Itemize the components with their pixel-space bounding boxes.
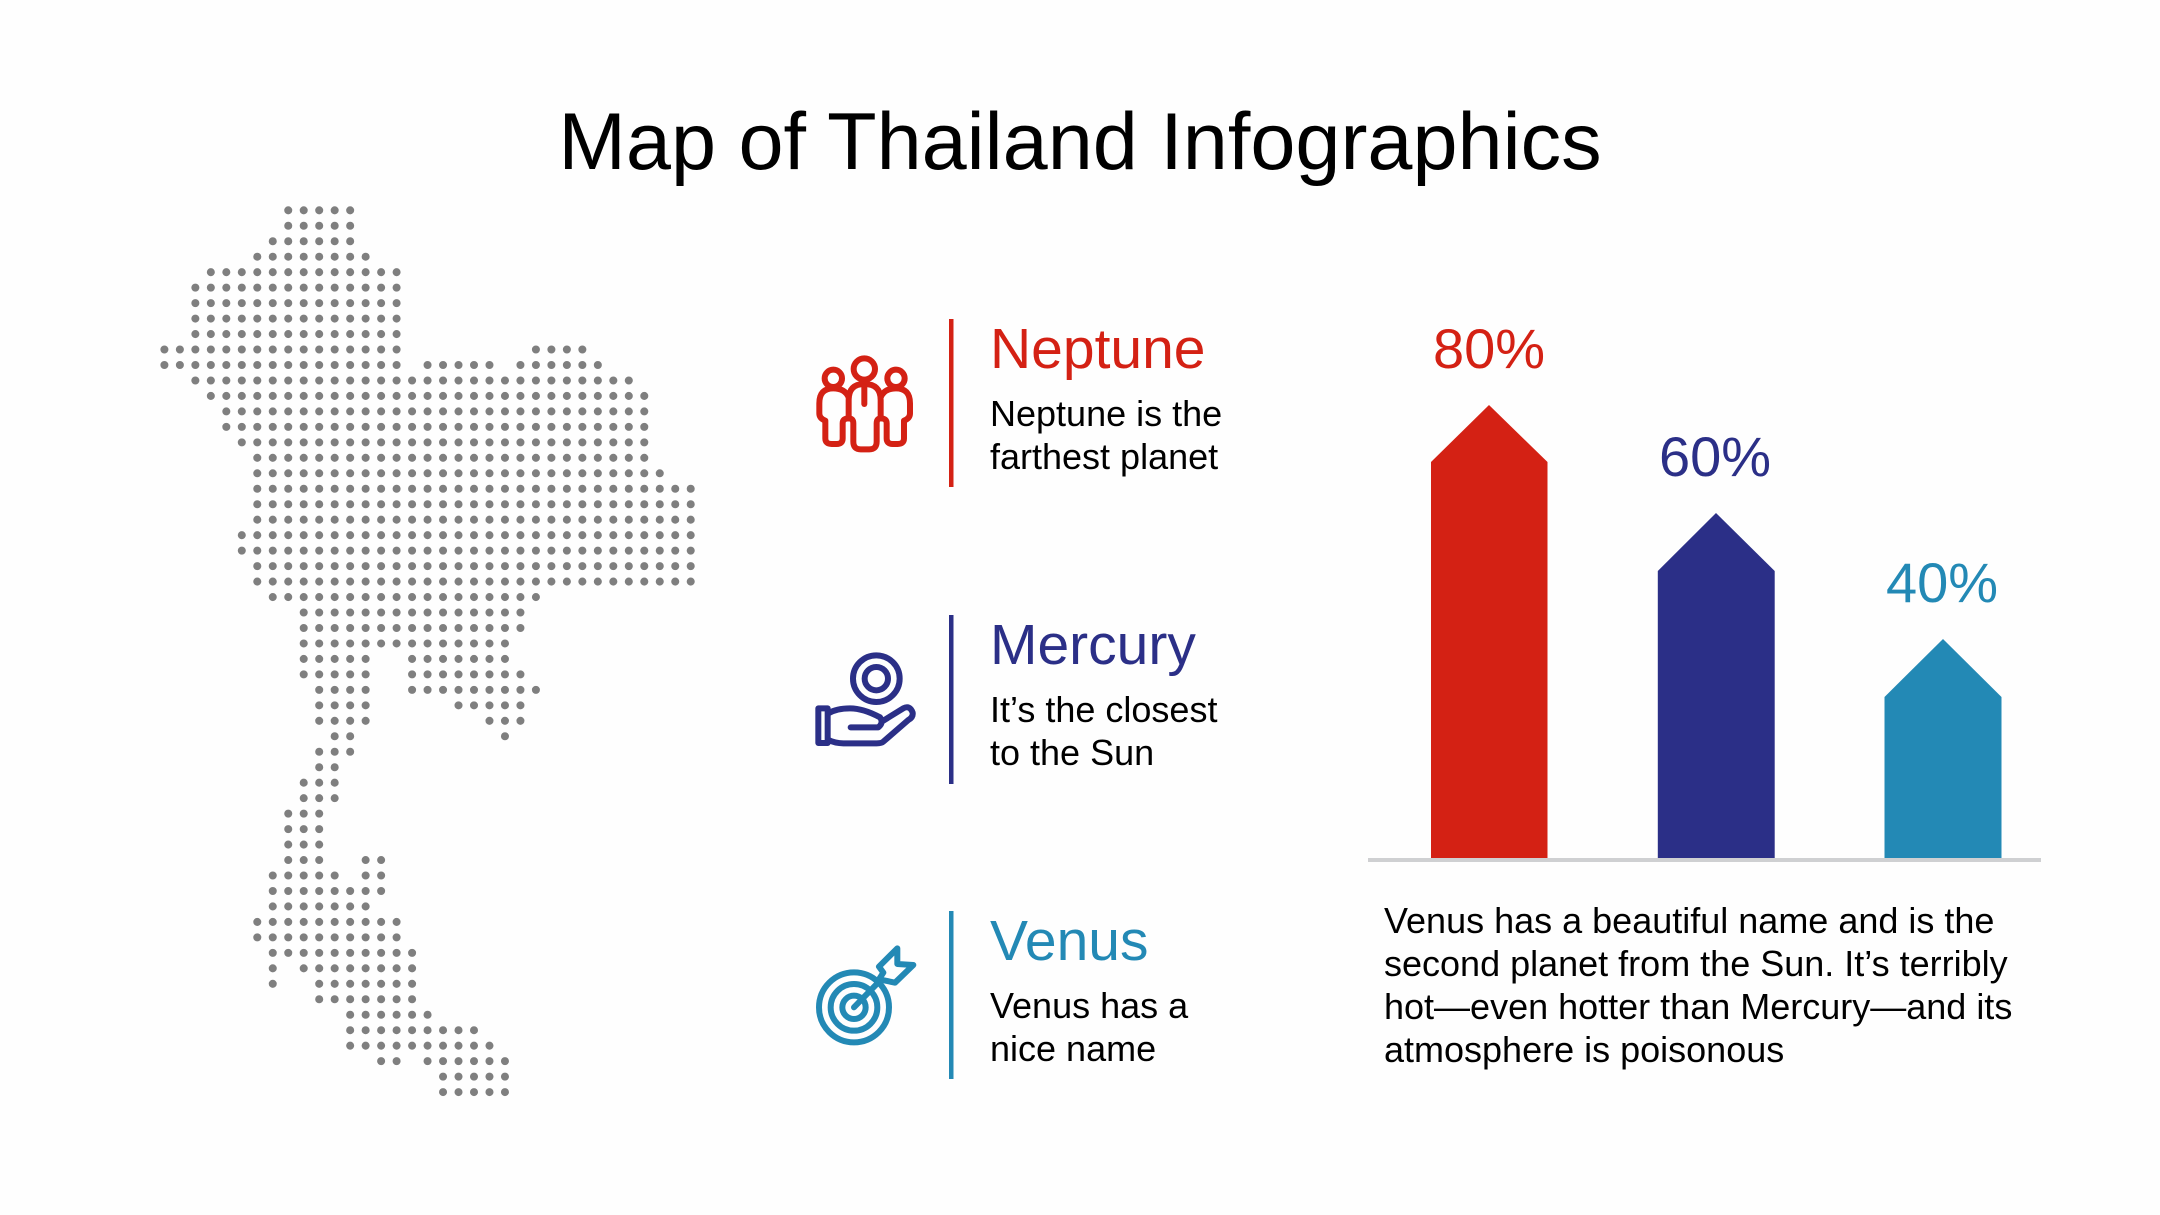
bar: 60%: 60% (1659, 425, 1771, 488)
bar: 60% (1658, 425, 1775, 858)
divider: Mercury (949, 615, 954, 784)
text: Venus description: Venus has a (990, 985, 1189, 1026)
axis line (1368, 858, 2041, 862)
bar: 80% (1431, 317, 1548, 858)
text: Mercury description: to the Sun (990, 732, 1154, 773)
panel: Neptune (819, 317, 1222, 487)
text: Neptune description: farthest planet (990, 436, 1218, 477)
panel: Venus (819, 909, 1189, 1079)
divider: Neptune (949, 319, 954, 487)
text block: Venus summary: second planet from the Sun. It’s terribly (1384, 943, 2008, 984)
text: Mercury description: It’s the closest (990, 689, 1217, 730)
dotted map of Thailand (164, 210, 692, 1092)
heading: Mercury: Mercury (990, 613, 1196, 677)
text: Venus description: nice name (990, 1028, 1156, 1069)
heading: Venus: Venus (990, 909, 1148, 973)
heading: Neptune: Neptune (990, 317, 1206, 381)
panel: Mercury (818, 613, 1217, 784)
title: Map of Thailand Infographics (558, 97, 1602, 187)
bar chart (1368, 317, 2041, 862)
icon: hand with coin (818, 655, 913, 743)
text block: Venus summary: Venus has a beautiful name and is the (1384, 900, 1994, 941)
bar: 40%: 40% (1886, 551, 1998, 614)
icon: target with arrow (819, 948, 913, 1042)
text block: Venus summary: atmosphere is poisonous (1384, 1029, 1784, 1070)
bar: 40% (1884, 551, 2002, 858)
divider: Venus (949, 911, 954, 1079)
text block: Venus summary: hot—even hotter than Mercury—and its (1384, 986, 2012, 1027)
icon: people (819, 358, 910, 449)
bar: 80%: 80% (1433, 317, 1545, 380)
text: Neptune description: Neptune is the (990, 393, 1222, 434)
